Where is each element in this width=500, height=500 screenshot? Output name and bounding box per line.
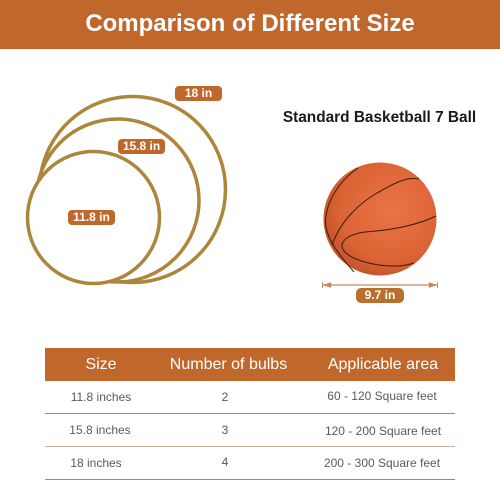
arrow: ball diameter bbox=[322, 282, 438, 288]
label: 18 in bbox=[175, 86, 222, 101]
label: 15.8 in: 15.8 in bbox=[123, 139, 160, 153]
label: 9.7 in bbox=[356, 288, 404, 303]
icon: basketball bbox=[324, 162, 436, 276]
chart: ring size comparison bbox=[26, 94, 228, 286]
row 1: 11.8 inches bbox=[71, 390, 131, 404]
row 2: 120 - 200 Square feet bbox=[325, 424, 441, 438]
label: 11.8 in: 11.8 in bbox=[73, 210, 110, 224]
label: 9.7 in: 9.7 in bbox=[365, 288, 395, 302]
row 2: 3 bbox=[222, 423, 228, 437]
row 3: 18 inches bbox=[70, 456, 122, 470]
row 3: 200 - 300 Square feet bbox=[324, 456, 440, 470]
row 1: 2 bbox=[222, 390, 228, 404]
row 2 bbox=[45, 423, 455, 447]
label: 18 in: 18 in bbox=[185, 86, 212, 100]
row 2: 15.8 inches bbox=[69, 423, 131, 437]
row 3: 4 bbox=[222, 455, 228, 469]
column header: bulbs: Number of bulbs bbox=[170, 356, 287, 373]
table: size comparison bbox=[45, 348, 455, 381]
column header: size: Size bbox=[85, 356, 117, 373]
heading: standard basketball: Standard Basketball 7 Ball bbox=[283, 109, 476, 126]
title banner bbox=[0, 0, 500, 49]
row 1 bbox=[45, 389, 455, 414]
title banner: Comparison of Different Size bbox=[85, 10, 415, 37]
column header: area: Applicable area bbox=[328, 356, 438, 373]
row 3 bbox=[45, 455, 455, 480]
row 1: 60 - 120 Square feet bbox=[327, 389, 437, 403]
